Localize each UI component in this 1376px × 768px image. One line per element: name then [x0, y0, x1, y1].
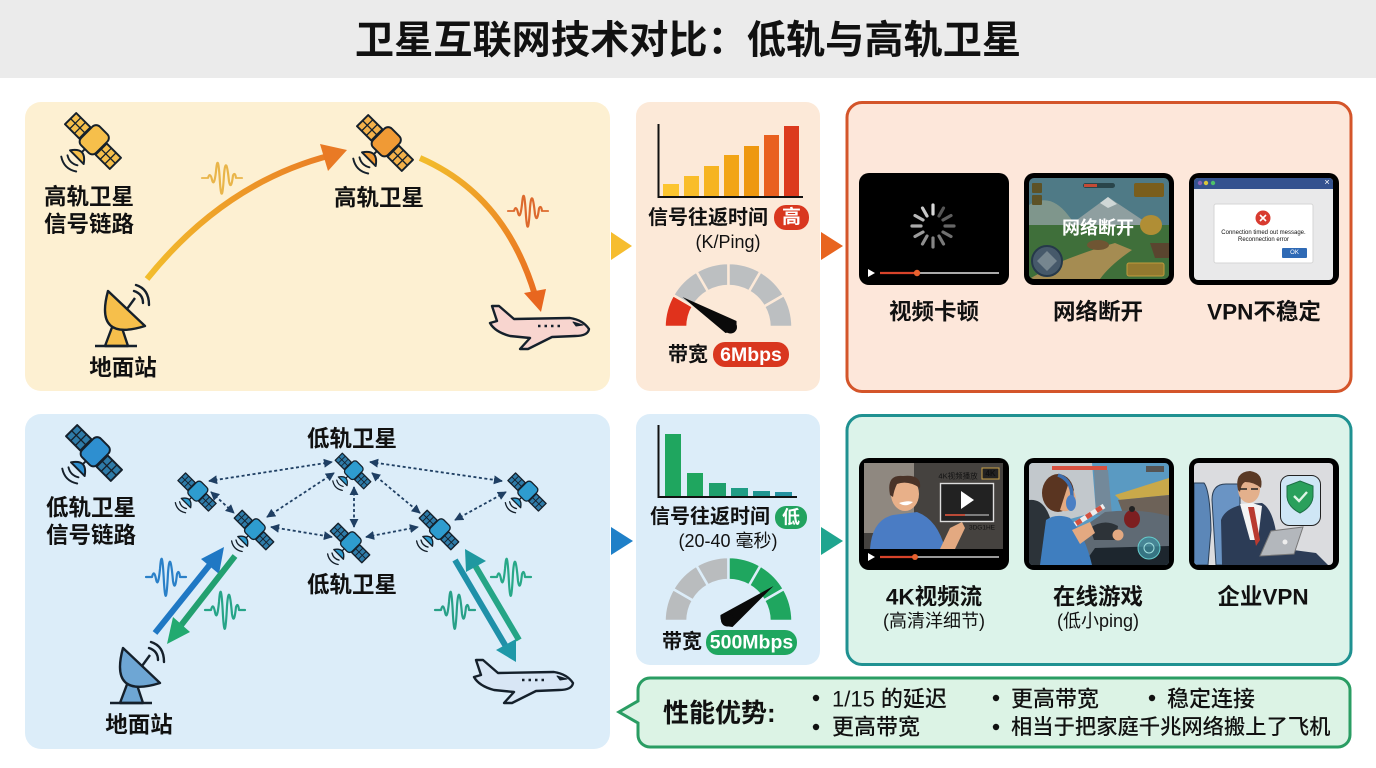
badge: high — [774, 205, 809, 230]
badge: 500Mbps: 500Mbps — [710, 632, 793, 654]
label: video buffering: 视频卡顿 — [889, 300, 979, 324]
gauge: high bandwidth — [664, 557, 792, 627]
icon: LEO satellite 4 — [316, 520, 373, 577]
latency label: 信号往返时间 — [650, 505, 770, 528]
icon: LEO aircraft — [474, 660, 573, 703]
bandwidth label: 带宽 — [668, 342, 708, 366]
title bar — [0, 0, 1376, 78]
bar chart: low latency — [658, 425, 797, 497]
callout bullets: 相当于把家庭千兆网络搬上了飞机 — [1011, 714, 1330, 739]
card: VPN error dialog — [1189, 173, 1339, 285]
bandwidth label: 带宽 — [662, 629, 702, 653]
badge: low — [775, 506, 807, 529]
label: LEO satellites bottom: 低轨卫星 — [307, 572, 397, 598]
callout bullets: 更高带宽 — [1011, 686, 1099, 712]
callout heading: 性能优势: — [663, 698, 776, 728]
card: 4K streaming: 4K视频播放 — [938, 470, 978, 480]
panel: GEO signal link — [25, 102, 610, 391]
icon: LEO satellite 1 — [164, 470, 219, 525]
latency value: (K/Ping) — [695, 232, 761, 252]
label: LEO satellites top: 低轨卫星 — [307, 426, 397, 452]
GEO legend label: 信号链路 — [44, 212, 134, 236]
panel: LEO outcomes — [847, 416, 1351, 664]
panel: GEO metrics — [636, 102, 820, 391]
arrow: metrics to LEO outcomes — [821, 527, 843, 555]
card: VPN error dialog: Reconnection error — [1238, 237, 1289, 243]
icon: LEO satellite 2 — [220, 507, 277, 564]
icon: LEO satellite 6 — [494, 470, 549, 525]
arrow: ground to GEO satellite — [147, 144, 347, 279]
label: network disconnected: 网络断开 — [1053, 298, 1143, 324]
callout bullets: 稳定连接 — [1167, 686, 1255, 712]
icon: wave 1 — [146, 559, 186, 596]
card: game disconnected: 网络断开 — [1062, 217, 1134, 238]
icon: aircraft — [490, 306, 589, 349]
title bar: 卫星互联网技术对比：低轨与高轨卫星 — [355, 20, 1021, 62]
panel: LEO metrics — [636, 414, 820, 665]
label: online gaming: (低小ping) — [1057, 611, 1139, 631]
icon: wave 4 — [435, 592, 475, 629]
card: online gaming — [1024, 458, 1174, 570]
callout bullets — [813, 686, 1330, 740]
icon: LEO satellite 5 — [405, 507, 462, 564]
badge: 6Mbps: 6Mbps — [720, 344, 782, 366]
panel: LEO signal link — [25, 414, 610, 749]
icon: GEO satellite — [336, 110, 418, 192]
icon: wave 3 — [491, 559, 531, 596]
GEO legend label: 高轨卫星 — [44, 184, 134, 210]
icon: GEO legend satellite — [44, 108, 126, 190]
badge: low: 低 — [782, 508, 800, 528]
latency label: 信号往返时间 — [648, 206, 768, 229]
LEO legend label: 低轨卫星 — [46, 496, 136, 520]
arrow: metrics to GEO outcomes — [821, 232, 843, 260]
arrow: GEO satellite to aircraft — [420, 158, 546, 312]
card: VPN error dialog: Connection timed out message. — [1221, 230, 1306, 236]
label: online gaming: 在线游戏 — [1053, 584, 1143, 610]
LEO legend label: 信号链路 — [46, 522, 136, 548]
ground station label: 地面站 — [89, 356, 157, 380]
label: 4K streaming: (高清洋细节) — [883, 611, 985, 631]
icon: LEO satellite 3 — [322, 450, 374, 502]
gauge: low bandwidth — [664, 263, 792, 334]
label: 4K streaming: 4K视频流 — [886, 584, 982, 610]
card: 4K streaming — [859, 458, 1009, 570]
arrow: GEO link to metrics — [611, 232, 632, 260]
label: enterprise VPN: 企业VPN — [1217, 584, 1309, 610]
card: 4K streaming: 3DG1HE — [969, 524, 996, 532]
label: 4K streaming — [883, 584, 985, 631]
LEO constellation — [164, 450, 549, 577]
card: 4K streaming: 4K — [985, 469, 996, 478]
icon: downlink wave — [508, 196, 548, 227]
icon: LEO legend satellite — [45, 420, 127, 502]
callout bullets: 1/15 的延迟 — [832, 686, 947, 712]
icon: wave 2 — [205, 592, 245, 629]
arrow: ground uplink — [155, 547, 224, 633]
icon: LEO ground station — [110, 642, 164, 703]
card: game disconnected — [1024, 173, 1174, 285]
icon: uplink wave — [202, 163, 242, 194]
LEO ground station label: 地面站 — [105, 712, 173, 738]
inter-satellite links — [209, 462, 506, 537]
latency value: (20-40 毫秒) — [678, 531, 778, 551]
arrow: aircraft uplink — [465, 549, 519, 640]
label: online gaming — [1053, 584, 1143, 631]
panel: GEO outcomes — [847, 102, 1351, 392]
card: VPN error dialog: OK — [1290, 250, 1299, 256]
GEO satellite label: 高轨卫星 — [334, 186, 424, 210]
arrow: aircraft downlink — [455, 560, 516, 662]
callout bullets: 更高带宽 — [832, 714, 920, 740]
arrow: LEO link to metrics — [611, 527, 633, 555]
callout: performance advantages — [619, 678, 1350, 747]
label: VPN unstable: VPN不稳定 — [1207, 300, 1321, 324]
card: video buffering — [859, 173, 1009, 285]
icon: ground station — [95, 285, 149, 346]
card: enterprise VPN — [1189, 458, 1339, 570]
card: VPN error dialog: ✕ — [1324, 180, 1330, 186]
bar chart: high latency — [658, 124, 803, 197]
arrow: ground downlink — [167, 556, 235, 644]
badge: high: 高 — [782, 205, 801, 228]
